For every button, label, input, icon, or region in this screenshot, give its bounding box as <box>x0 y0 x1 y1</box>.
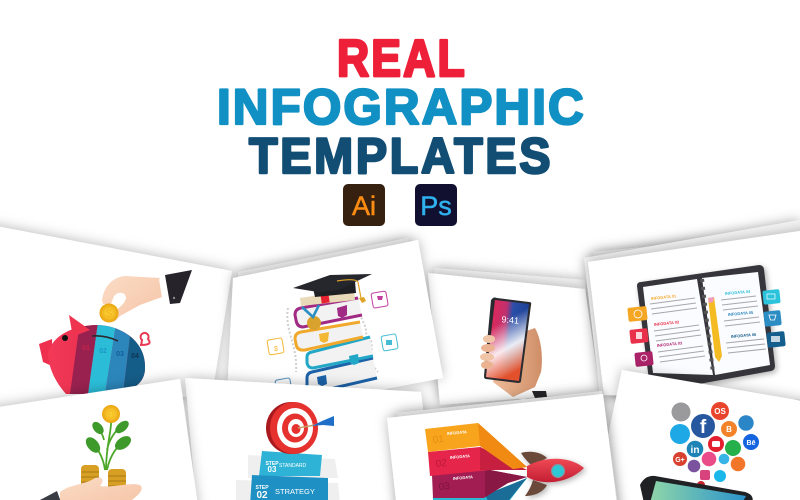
icon: piggy bank: 03 <box>116 351 124 358</box>
text: left page entries: INFODATA 02 <box>654 319 680 327</box>
chart: rocket ribbons: 02 <box>435 458 448 470</box>
icon: badge dollar <box>267 338 284 355</box>
chart: rocket ribbons: INFODATA <box>450 453 470 460</box>
chart: strategy steps: STEP <box>255 485 269 491</box>
icon: hand with coin <box>100 270 192 322</box>
icon: piggy bank: 04 <box>131 353 139 360</box>
heading: templates: TEMPLATES <box>249 129 551 184</box>
panel: phone sheet <box>428 268 600 405</box>
text: left page entries: INFODATA 03 <box>657 340 683 348</box>
icon: rocket <box>521 452 584 496</box>
icon: open notebook <box>627 265 786 392</box>
icon: Adobe Illustrator <box>343 184 385 226</box>
icon: social media circles: G+ <box>675 457 685 464</box>
icon: piggy bank: 02 <box>99 348 107 355</box>
icon: money plant in hand <box>40 405 142 500</box>
icon: social media circles <box>670 402 759 489</box>
icon: money plant in hand: B <box>107 410 115 421</box>
panel: social media sheet <box>590 370 800 500</box>
icon: smartphone <box>640 476 753 500</box>
panel: rocket sheet <box>387 391 620 500</box>
icon: Adobe Photoshop: Ps <box>420 191 452 221</box>
chart: strategy steps <box>236 451 340 500</box>
icon: badge trophy <box>371 291 388 308</box>
text: right page entries: INFODATA 06 <box>731 332 757 339</box>
icon: social media circles: Bē <box>747 440 756 447</box>
icon: social media circles: f <box>700 417 707 438</box>
icon: stack of books <box>287 274 378 393</box>
icon: social media circles: OS <box>714 407 726 416</box>
chart: rocket ribbons: 03 <box>438 481 451 493</box>
chart: strategy steps: 03 <box>268 465 277 474</box>
chart: rocket ribbons: 01 <box>432 434 445 446</box>
icon: hand holding phone <box>480 298 547 400</box>
sheets row two <box>0 370 800 500</box>
icon: piggy bank: 01 <box>82 345 90 352</box>
icon: social media circles: in <box>691 445 699 456</box>
chart: rocket ribbons: INFODATA <box>447 429 467 436</box>
panel: books sheet <box>226 238 443 415</box>
text: right page entries: INFODATA 05 <box>728 310 754 317</box>
icon: Adobe Illustrator: Ai <box>352 191 376 221</box>
icon: social media circles: B <box>726 425 732 434</box>
title <box>217 30 584 184</box>
icon: badge small <box>275 378 292 395</box>
icon: piggy bank <box>39 315 151 394</box>
chart: rocket ribbons: INFODATA <box>453 474 473 481</box>
text: right page entries: INFODATA 04 <box>725 289 751 296</box>
sheets row one <box>0 220 800 415</box>
text: left page entries: INFODATA 01 <box>651 293 677 301</box>
chart: strategy steps: STRATEGY <box>275 487 315 496</box>
panel: target sheet <box>185 378 436 500</box>
chart: rocket ribbons <box>425 423 527 500</box>
text: right page entries <box>725 289 757 339</box>
icon: hand holding phone: 9:41 <box>501 314 519 326</box>
heading: infographic: INFOGRAPHIC <box>217 79 584 135</box>
heading: real: REAL <box>337 30 465 88</box>
chart: strategy steps: STEP <box>265 461 279 467</box>
icon: hand with coin: $ <box>106 308 112 320</box>
icon: badge dollar: $ <box>274 346 278 353</box>
panel: piggy bank sheet <box>0 223 232 410</box>
panel: notebook sheet <box>584 220 800 400</box>
icon: badge chart <box>381 334 398 351</box>
panel: plant sheet <box>0 379 200 500</box>
icon: Adobe Photoshop <box>415 184 457 226</box>
chart: strategy steps: STANDARD <box>279 463 307 469</box>
icon: dart target <box>266 402 334 454</box>
text: left page entries <box>651 293 683 348</box>
